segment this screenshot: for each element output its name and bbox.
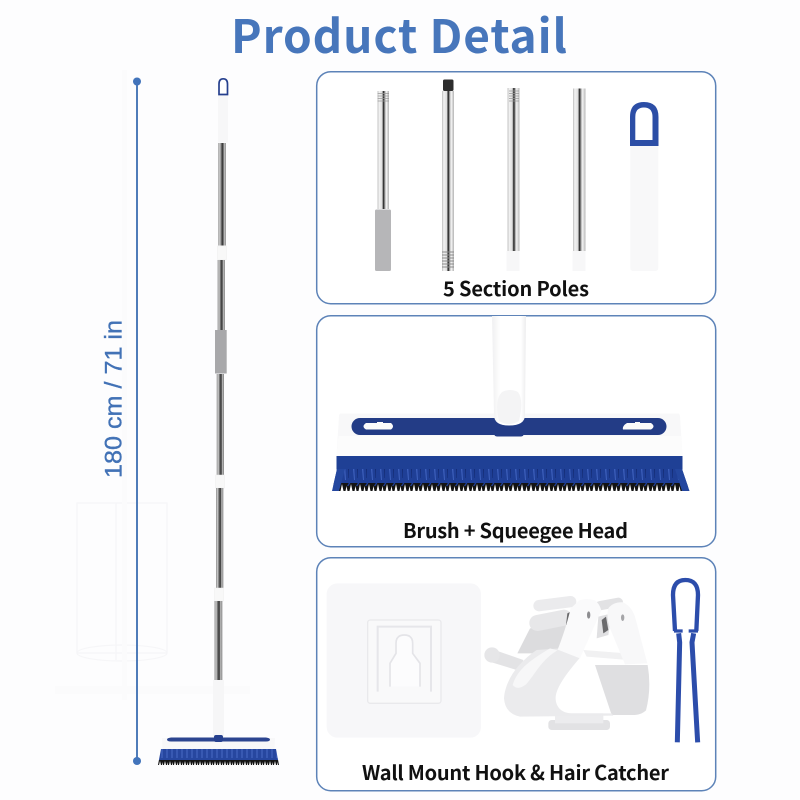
panel label: 5 Section Poles <box>443 273 589 302</box>
collar 2 <box>216 475 224 488</box>
brush head <box>332 316 690 491</box>
clamp body with hole <box>504 648 613 717</box>
panel: wall mount hook and hair catcher <box>317 558 716 791</box>
panel label: Brush + Squeegee Head <box>403 515 628 544</box>
panel: 5 section poles <box>317 72 716 304</box>
right catcher arm <box>692 633 698 742</box>
pole 5 white handle with blue loop <box>630 102 658 271</box>
height dimension <box>100 78 141 765</box>
white head plate <box>336 414 682 456</box>
pole segment 2 <box>218 260 225 330</box>
pole 2 with threaded end <box>442 80 454 271</box>
panel frame <box>317 558 716 791</box>
bristles <box>332 469 690 491</box>
panel frame <box>317 72 716 304</box>
panel frame <box>317 316 716 547</box>
collar 3 <box>214 588 224 601</box>
faint background furniture <box>55 70 250 700</box>
lower white sleeve <box>213 680 224 737</box>
adhesive wall pad <box>327 583 481 738</box>
panel label: Wall Mount Hook & Hair Catcher <box>362 757 669 786</box>
white pole <box>492 316 526 426</box>
neck socket <box>214 735 223 742</box>
collar 1 <box>218 246 226 260</box>
back plate and rollers <box>517 622 572 653</box>
pole segment 1 <box>218 143 226 246</box>
dimension line <box>136 81 138 761</box>
left slot <box>364 422 393 430</box>
head inlay <box>167 738 270 742</box>
pole segment 4 <box>216 488 223 588</box>
left catcher arm <box>677 633 680 742</box>
head plate <box>162 738 275 750</box>
pole 4 <box>572 88 586 271</box>
right slot <box>623 422 654 430</box>
catcher loop <box>673 580 698 631</box>
rear loop wall <box>595 665 649 715</box>
top dot <box>133 78 141 86</box>
wall clamp hook <box>484 599 649 730</box>
hook peg <box>489 649 523 671</box>
grey grip <box>215 330 227 374</box>
assembled mop <box>158 79 279 765</box>
top white handle <box>218 96 228 142</box>
squeegee strip <box>336 456 682 470</box>
blue inlay <box>352 418 666 435</box>
blue hair catcher <box>673 580 698 742</box>
neck socket <box>494 417 524 436</box>
pole segment 3 <box>217 374 224 475</box>
front arms <box>558 599 601 658</box>
pole 1 with grey grip <box>375 91 391 271</box>
pole 3 <box>506 88 520 271</box>
height label: 180 cm / 71 in <box>100 320 128 478</box>
small brush head <box>158 735 279 765</box>
pole segment 5 <box>214 601 222 680</box>
bottom dot <box>133 757 141 765</box>
panel: brush and squeegee head <box>317 316 716 547</box>
bristles <box>158 749 279 765</box>
hanging loop <box>219 79 228 94</box>
title: Product Detail <box>231 1 567 67</box>
base flange <box>548 720 610 730</box>
